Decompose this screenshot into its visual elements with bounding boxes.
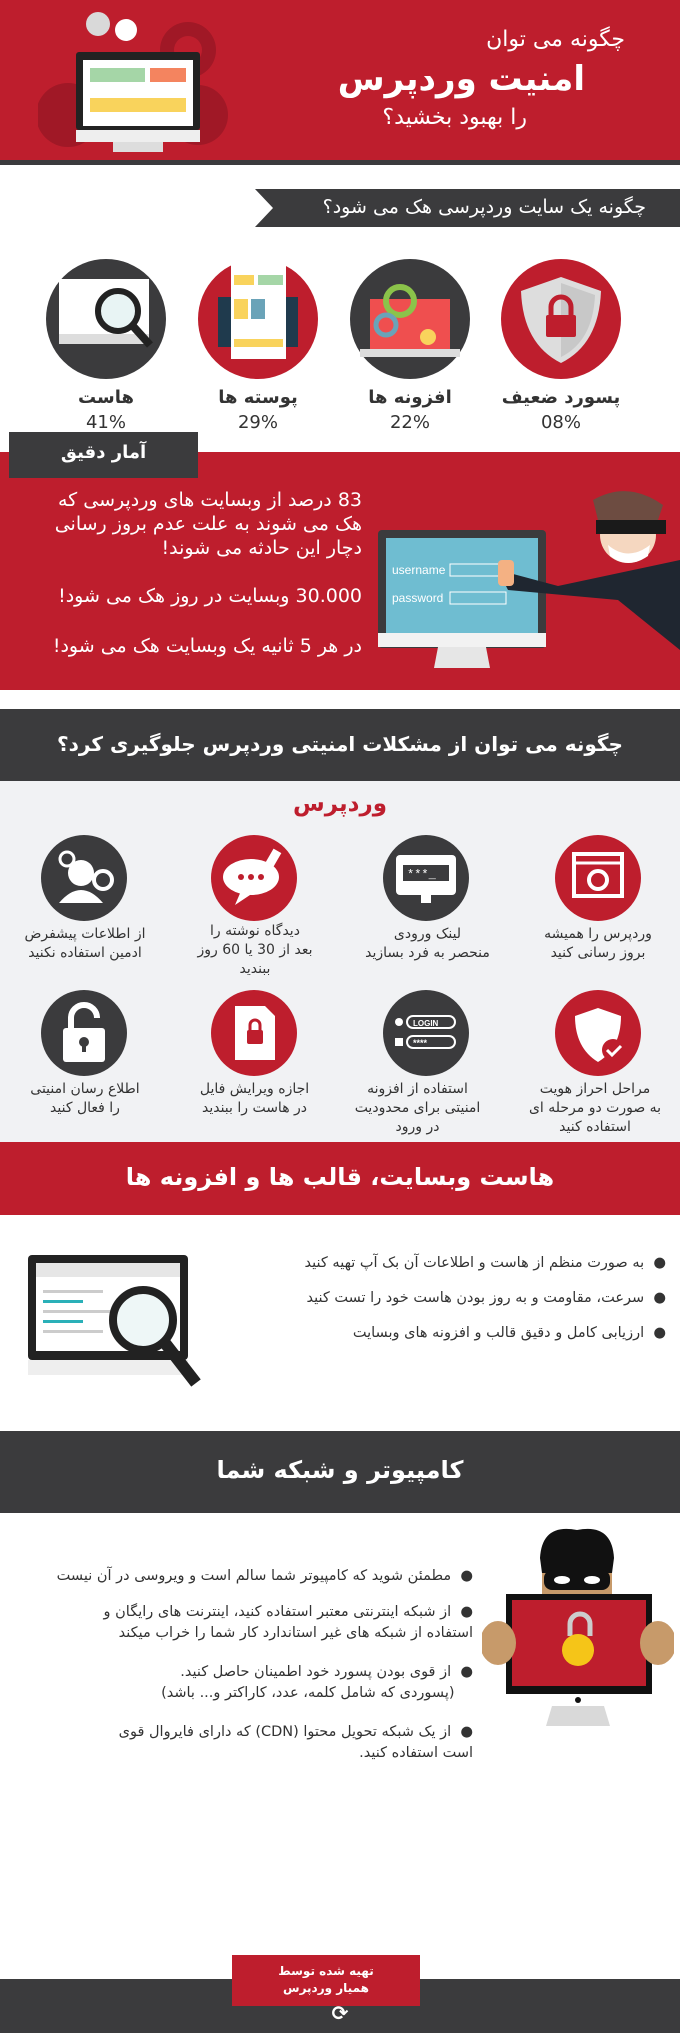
tip: two-step auth: مراحل احراز هویت xyxy=(540,1081,650,1097)
section heading: hosting, themes, plugins xyxy=(0,1142,680,1215)
tip: limit login: **** xyxy=(413,1038,428,1048)
section heading: computer and network: کامپیوتر و شبکه شما xyxy=(216,1456,464,1484)
subheading: وردپرس xyxy=(293,791,387,817)
illustration: hacker at login screen: username xyxy=(392,563,446,577)
tip: admin defaults: از اطلاعات پیشفرض xyxy=(24,926,146,942)
computer bullet list: ● از قوی بودن پسورد خود اطمینان حاصل کنید. xyxy=(180,1664,473,1680)
tip: two-step auth: استفاده کنید xyxy=(559,1119,631,1135)
stats text xyxy=(53,489,362,657)
tip: limit login xyxy=(355,990,480,1135)
tip: admin defaults: ادمین استفاده نکنید xyxy=(28,945,142,961)
tip: limit login: در ورود xyxy=(396,1119,439,1135)
tip: update: بروز رسانی کنید xyxy=(551,945,645,961)
header banner xyxy=(0,0,680,160)
tip: file edit: اجازه ویرایش فایل xyxy=(200,1081,309,1097)
computer bullet list: ● از شبکه اینترنتی معتبر استفاده کنید، اینترنت های رایگان و استفاده از شبکه های غیر استاندارد کار شما را خراب میکند xyxy=(104,1604,473,1641)
section heading: computer and network xyxy=(0,1431,680,1513)
illustration: hacker at login screen: password xyxy=(392,591,443,605)
tip: close comments xyxy=(196,835,312,977)
icon: monitor with magnifier xyxy=(28,1255,201,1387)
title text: امنیت وردپرس xyxy=(338,59,585,99)
stat: posts 29%: 29% xyxy=(238,412,278,433)
title text: را بهبود بخشید؟ xyxy=(382,105,527,130)
tip: admin defaults xyxy=(24,835,146,961)
tip: two-step auth xyxy=(529,990,661,1135)
tip: login link xyxy=(365,835,490,961)
tip: close comments: ببندید xyxy=(240,961,270,977)
hosting bullet list: ● سرعت، مقاومت و به روز بودن هاست خود را تست کنید xyxy=(306,1290,666,1306)
red stats section xyxy=(0,452,680,690)
computer bullet list: ● از یک شبکه تحویل محتوا (CDN) که دارای فایروال قوی است استفاده کنید. xyxy=(119,1724,473,1761)
stat: host 41%: هاست xyxy=(78,387,134,408)
tip: update: وردپرس را همیشه xyxy=(544,926,652,942)
hosting bullet list: ● به صورت منظم از هاست و اطلاعات آن بک آپ تهیه کنید xyxy=(305,1255,666,1271)
illustration: hacker at login screen xyxy=(378,491,680,668)
hosting bullet list: ● ارزیابی کامل و دقیق قالب و افزونه های وبسایت xyxy=(353,1325,666,1341)
stat: host 41%: 41% xyxy=(86,412,126,433)
tip: security notifications: را فعال کنید xyxy=(50,1100,120,1116)
stats label tab xyxy=(9,432,198,478)
title text xyxy=(338,26,625,130)
title text: چگونه می توان xyxy=(486,27,625,52)
footer logo: ⟳ xyxy=(332,2001,348,2025)
tip: login link: ***_ xyxy=(407,868,437,882)
tip: close comments: دیدگاه نوشته را xyxy=(210,923,300,939)
tip: security notifications xyxy=(30,990,140,1116)
tip: security notifications: اطلاع رسان امنیتی xyxy=(30,1081,140,1097)
stat: weak password 08%: 08% xyxy=(541,412,581,433)
hosting bullet list xyxy=(305,1253,666,1341)
tip: login link: منحصر به فرد بسازید xyxy=(365,945,490,961)
section heading: hosting, themes, plugins: هاست وبسایت، قالب ها و افزونه ها xyxy=(126,1163,554,1191)
credit box: تهیه شده توسط xyxy=(278,1964,374,1978)
footer xyxy=(0,1979,680,2033)
stat: posts 29% xyxy=(198,266,318,433)
computer bullet list xyxy=(57,1566,473,1761)
credit box: همیار وردپرس xyxy=(283,1981,369,1995)
section heading: prevention xyxy=(0,709,680,781)
stat: plugins 22%: 22% xyxy=(390,412,430,433)
credit box xyxy=(232,1955,420,2006)
tip: update xyxy=(544,835,652,961)
stat: plugins 22% xyxy=(350,259,470,433)
section heading: how hacked: چگونه یک سایت وردپرسی هک می شود؟ xyxy=(323,196,646,218)
section heading: how hacked xyxy=(255,189,680,227)
tip: two-step auth: به صورت دو مرحله ای xyxy=(529,1100,661,1116)
stat: posts 29%: پوسته ها xyxy=(218,387,298,408)
stat: plugins 22%: افزونه ها xyxy=(368,387,452,408)
section heading: prevention: چگونه می توان از مشکلات امنیتی وردپرس جلوگیری کرد؟ xyxy=(57,732,623,756)
stats text: در هر 5 ثانیه یک وبسایت هک می شود! xyxy=(53,635,362,657)
tip: limit login: استفاده از افزونه xyxy=(367,1081,468,1097)
computer bullet list: (پسوردی که شامل کلمه، عدد، کاراکتر و... باشد) xyxy=(161,1685,455,1701)
stats text: 83 درصد از وبسایت های وردپرسی که هک می شوند به علت عدم بروز رسانی دچار این حادثه می شوند! xyxy=(55,489,362,559)
tip: limit login: امنیتی برای محدودیت xyxy=(355,1100,480,1116)
header illustration: monitor with gears xyxy=(38,12,228,152)
tip: file edit: در هاست را ببندید xyxy=(202,1100,307,1116)
tip: limit login: LOGIN xyxy=(413,1019,439,1028)
illustration: hacker holding screen xyxy=(482,1528,674,1726)
stat: host 41% xyxy=(46,259,166,433)
tip: close comments: بعد از 30 یا 60 روز xyxy=(197,942,312,958)
panel: wordpress tips xyxy=(0,781,680,1142)
stats text: 30.000 وبسایت در روز هک می شود! xyxy=(58,585,362,607)
stat: weak password 08%: پسورد ضعیف xyxy=(502,387,620,408)
stat: weak password 08% xyxy=(501,259,621,433)
stats label tab: آمار دقیق xyxy=(61,442,146,463)
tip: login link: لینک ورودی xyxy=(394,926,461,942)
tip: file edit xyxy=(200,990,309,1116)
computer bullet list: ● مطمئن شوید که کامپیوتر شما سالم است و ویروسی در آن نیست xyxy=(57,1568,473,1584)
